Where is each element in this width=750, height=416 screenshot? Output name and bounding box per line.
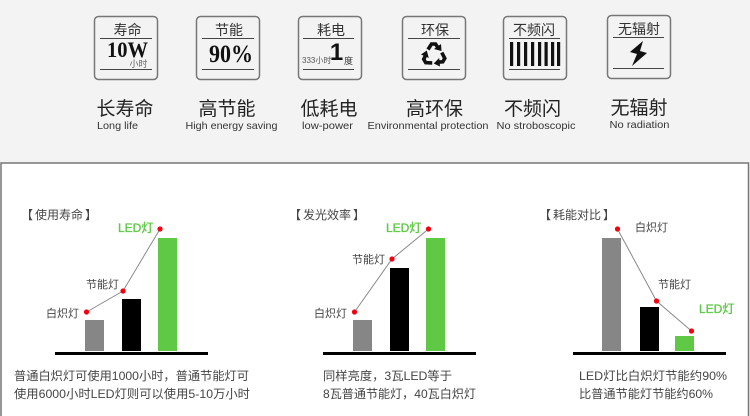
- feature: no radiation: No radiation: [610, 119, 670, 131]
- chart: service life: 节能灯: [86, 277, 119, 291]
- heading: service life: 【使用寿命】: [21, 207, 97, 222]
- icon: recycling arrows: [421, 44, 447, 67]
- feature: no stroboscopic: [496, 16, 576, 132]
- feature: low power: [298, 16, 362, 132]
- feature: no radiation: 无辐射: [618, 21, 660, 37]
- feature: no stroboscopic: 不频闪: [504, 98, 561, 120]
- chart: energy comparison: 白炽灯: [635, 220, 668, 234]
- chart: service life: [14, 207, 250, 401]
- chart: energy comparison: 节能灯: [658, 277, 691, 291]
- feature: long life: 10W: [107, 37, 148, 62]
- chart: service life: 白炽灯: [46, 306, 79, 320]
- feature: long life: 寿命: [114, 22, 142, 38]
- feature: low power: 耗电: [317, 22, 345, 38]
- caption: energy comparison: LED灯比白炽灯节能约90%: [579, 368, 727, 383]
- feature: low power: 333小时: [302, 55, 331, 65]
- chart: service life: LED灯: [118, 221, 153, 235]
- feature: long life: Long life: [97, 120, 138, 132]
- chart: energy comparison: [539, 208, 734, 401]
- feature: environmental protection: Environmental protection: [368, 120, 489, 132]
- chart: luminous efficiency: LED灯: [386, 221, 421, 235]
- feature: long life: 长寿命: [96, 98, 154, 120]
- chart: luminous efficiency: 白炽灯: [314, 306, 347, 320]
- chart: luminous efficiency: [289, 207, 476, 401]
- feature: no stroboscopic: 不频闪: [513, 22, 555, 38]
- feature: no radiation: [608, 16, 670, 131]
- feature: low power: 低耗电: [300, 98, 358, 120]
- feature: long life: [94, 16, 158, 132]
- chart: service life: 使用6000小时LED灯则可以使用5-10万小时: [14, 386, 250, 401]
- feature: low power: 度: [344, 55, 353, 66]
- feature: environmental protection: [368, 16, 489, 132]
- heading: luminous efficiency: 【发光效率】: [289, 207, 365, 222]
- feature: high energy saving: 高节能: [198, 98, 256, 120]
- chart: energy comparison: 比普通节能灯节能约60%: [579, 386, 713, 401]
- chart: luminous efficiency: 8瓦普通节能灯，40瓦白炽灯: [323, 386, 476, 401]
- chart: luminous efficiency: 节能灯: [352, 252, 385, 266]
- feature: environmental protection: 环保: [421, 22, 449, 38]
- feature: no radiation: 无辐射: [610, 97, 668, 119]
- feature: no stroboscopic: No stroboscopic: [496, 120, 576, 132]
- feature: low power: low-power: [302, 120, 354, 132]
- panel: comparison frame: [1, 163, 748, 416]
- chart: energy comparison: LED灯: [699, 302, 734, 316]
- feature: high energy saving: [186, 16, 278, 132]
- feature: high energy saving: 节能: [215, 22, 243, 38]
- heading: energy comparison: 【耗能对比】: [539, 208, 615, 222]
- icon: lightning bolt: [630, 41, 647, 66]
- feature: high energy saving: High energy saving: [186, 120, 278, 132]
- caption: service life: 普通白炽灯可使用1000小时，普通节能灯可: [14, 368, 249, 383]
- feature: long life: 小时: [129, 58, 148, 69]
- icon: flicker bars: [510, 42, 560, 66]
- feature: environmental protection: 高环保: [406, 98, 463, 120]
- feature: high energy saving: 90%: [209, 41, 253, 68]
- caption: luminous efficiency: 同样亮度，3瓦LED等于: [323, 368, 452, 383]
- feature: low power: 1: [330, 39, 343, 66]
